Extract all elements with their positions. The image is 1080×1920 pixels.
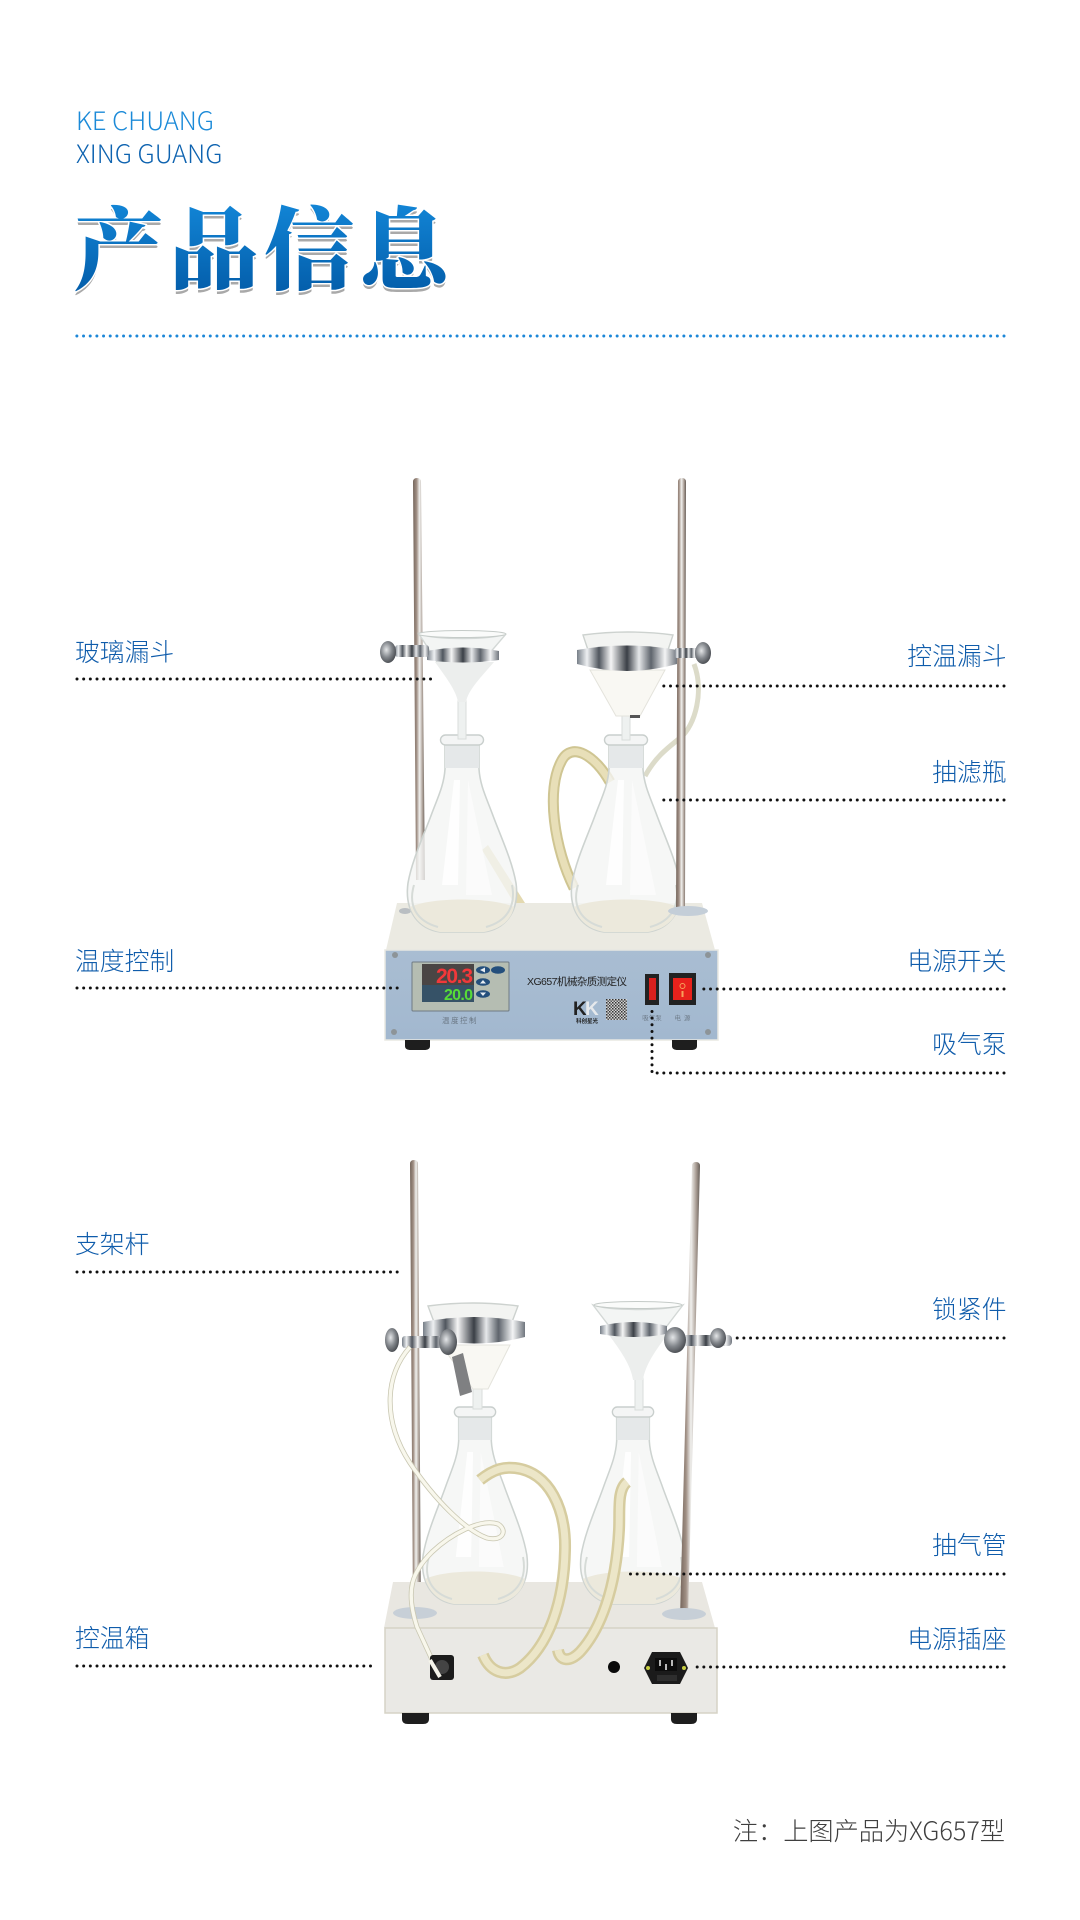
temperature controller (412, 962, 509, 1011)
title: 产品信息 (74, 178, 456, 308)
right support rod (676, 478, 686, 912)
logo: K (573, 999, 587, 1020)
label: temperature control box: 控温箱 (75, 1619, 149, 1655)
label: temperature control: 温度控制 (75, 942, 174, 978)
left suction hose (480, 1468, 565, 1673)
label: temperature-controlled funnel: 控温漏斗 (907, 637, 1006, 673)
left support rod (410, 1160, 421, 1615)
aviation connector (430, 1655, 454, 1680)
label: suction tube: 抽气管 (932, 1526, 1006, 1562)
suction hose (553, 752, 610, 888)
white wire (645, 664, 698, 776)
right flask (581, 1407, 685, 1604)
product photo: rear view (384, 1160, 732, 1724)
power switch: 电源 (674, 1012, 694, 1022)
title: 产品信息 (74, 182, 456, 312)
left funnel with temperature jacket (385, 1303, 525, 1409)
right suction hose (558, 1482, 627, 1659)
left flask (423, 1407, 527, 1604)
title divider (76, 334, 1004, 338)
power switch (669, 973, 696, 1022)
brand name (76, 101, 222, 171)
right support rod (680, 1162, 700, 1618)
base front panel (385, 950, 718, 1040)
temperature controller: 20.3 (436, 965, 473, 988)
label: glass funnel: 玻璃漏斗 (75, 633, 174, 669)
pump switch (642, 974, 662, 1022)
logo (573, 999, 599, 1025)
base top (384, 1582, 715, 1628)
brand name: KE CHUANG (76, 101, 214, 138)
logo: K (585, 999, 599, 1020)
right flask (571, 735, 681, 932)
power socket (644, 1652, 688, 1684)
title: 产品信息 (74, 178, 456, 308)
product photo: front view (380, 478, 718, 1050)
left support rod (413, 478, 425, 880)
pump switch: 吸气泵 (642, 1012, 662, 1022)
feet (405, 1040, 697, 1050)
label: locking piece: 锁紧件 (932, 1290, 1006, 1326)
base rear panel (385, 1628, 717, 1713)
feet (402, 1713, 697, 1724)
base top (386, 903, 715, 950)
white cable (390, 1347, 503, 1677)
label: air pump (652, 1011, 1006, 1073)
model name: XG657机械杂质测定仪 (527, 975, 628, 988)
temperature controller: 20.0 (444, 987, 473, 1004)
label: air pump: 吸气泵 (932, 1025, 1006, 1061)
QR code (606, 999, 627, 1020)
logo: 科创星光 (576, 1017, 598, 1025)
label: support rod: 支架杆 (75, 1225, 149, 1261)
footnote: 注：上图产品为XG657型 (733, 1812, 1005, 1848)
right temperature-controlled funnel (577, 632, 711, 740)
label: power socket: 电源插座 (907, 1620, 1006, 1656)
left flask (407, 735, 517, 932)
vent hole (608, 1661, 620, 1673)
label: power switch: 电源开关 (907, 942, 1006, 978)
brand name: XING GUANG (76, 134, 222, 171)
left glass funnel (380, 630, 506, 739)
right glass funnel (593, 1302, 732, 1410)
label: suction flask: 抽滤瓶 (932, 753, 1006, 789)
product photo: front view: 温度控制 (442, 1015, 478, 1026)
